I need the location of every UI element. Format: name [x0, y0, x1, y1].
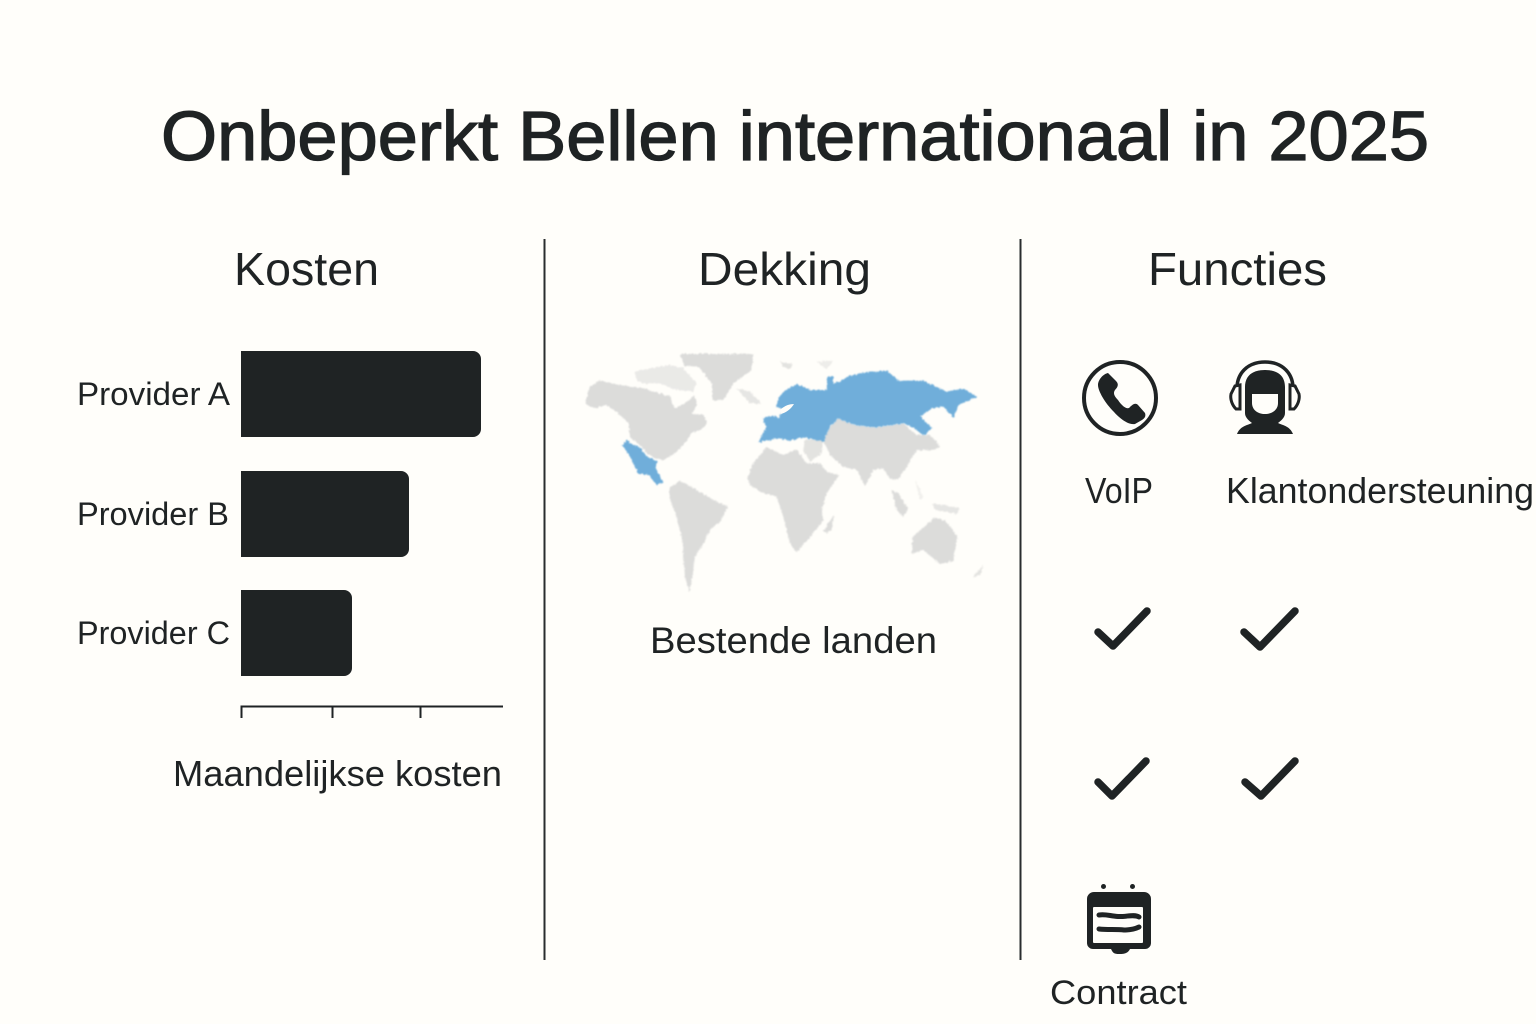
panel: Functies [1050, 243, 1534, 1012]
icon: contract [1087, 884, 1151, 954]
bar: Provider C [241, 590, 352, 676]
label: Provider C: Provider C [77, 615, 230, 651]
bar: Provider B [241, 471, 409, 557]
icon: phone [1084, 362, 1156, 434]
heading: Functies: Functies [1148, 243, 1327, 295]
label: Provider A: Provider A [77, 376, 231, 412]
icon: check support row 2 [1245, 761, 1295, 796]
divider left [544, 239, 546, 960]
label: Klantondersteuning: Klantondersteuning [1226, 470, 1534, 511]
world map [585, 354, 983, 592]
axis label: Maandelijkse kosten [173, 753, 502, 794]
icon: support agent [1231, 362, 1299, 434]
icon: check support row 1 [1244, 611, 1295, 647]
heading: Kosten: Kosten [234, 243, 379, 295]
label: Contract: Contract [1050, 974, 1188, 1012]
divider right [1020, 239, 1022, 960]
bar: Provider A [241, 351, 481, 437]
axis [242, 706, 503, 718]
map caption: Bestende landen [650, 620, 937, 661]
bar chart: monthly costs [77, 351, 503, 718]
label: Provider B: Provider B [77, 496, 229, 532]
heading: Dekking: Dekking [698, 243, 871, 295]
panel: Kosten [77, 243, 503, 794]
icon: check VoIP row 2 [1098, 761, 1146, 796]
label: VoIP: VoIP [1085, 470, 1153, 511]
title: Onbeperkt Bellen internationaal in 2025 [161, 97, 1429, 175]
panel: Dekking [585, 243, 983, 661]
icon: check VoIP row 1 [1098, 611, 1147, 646]
